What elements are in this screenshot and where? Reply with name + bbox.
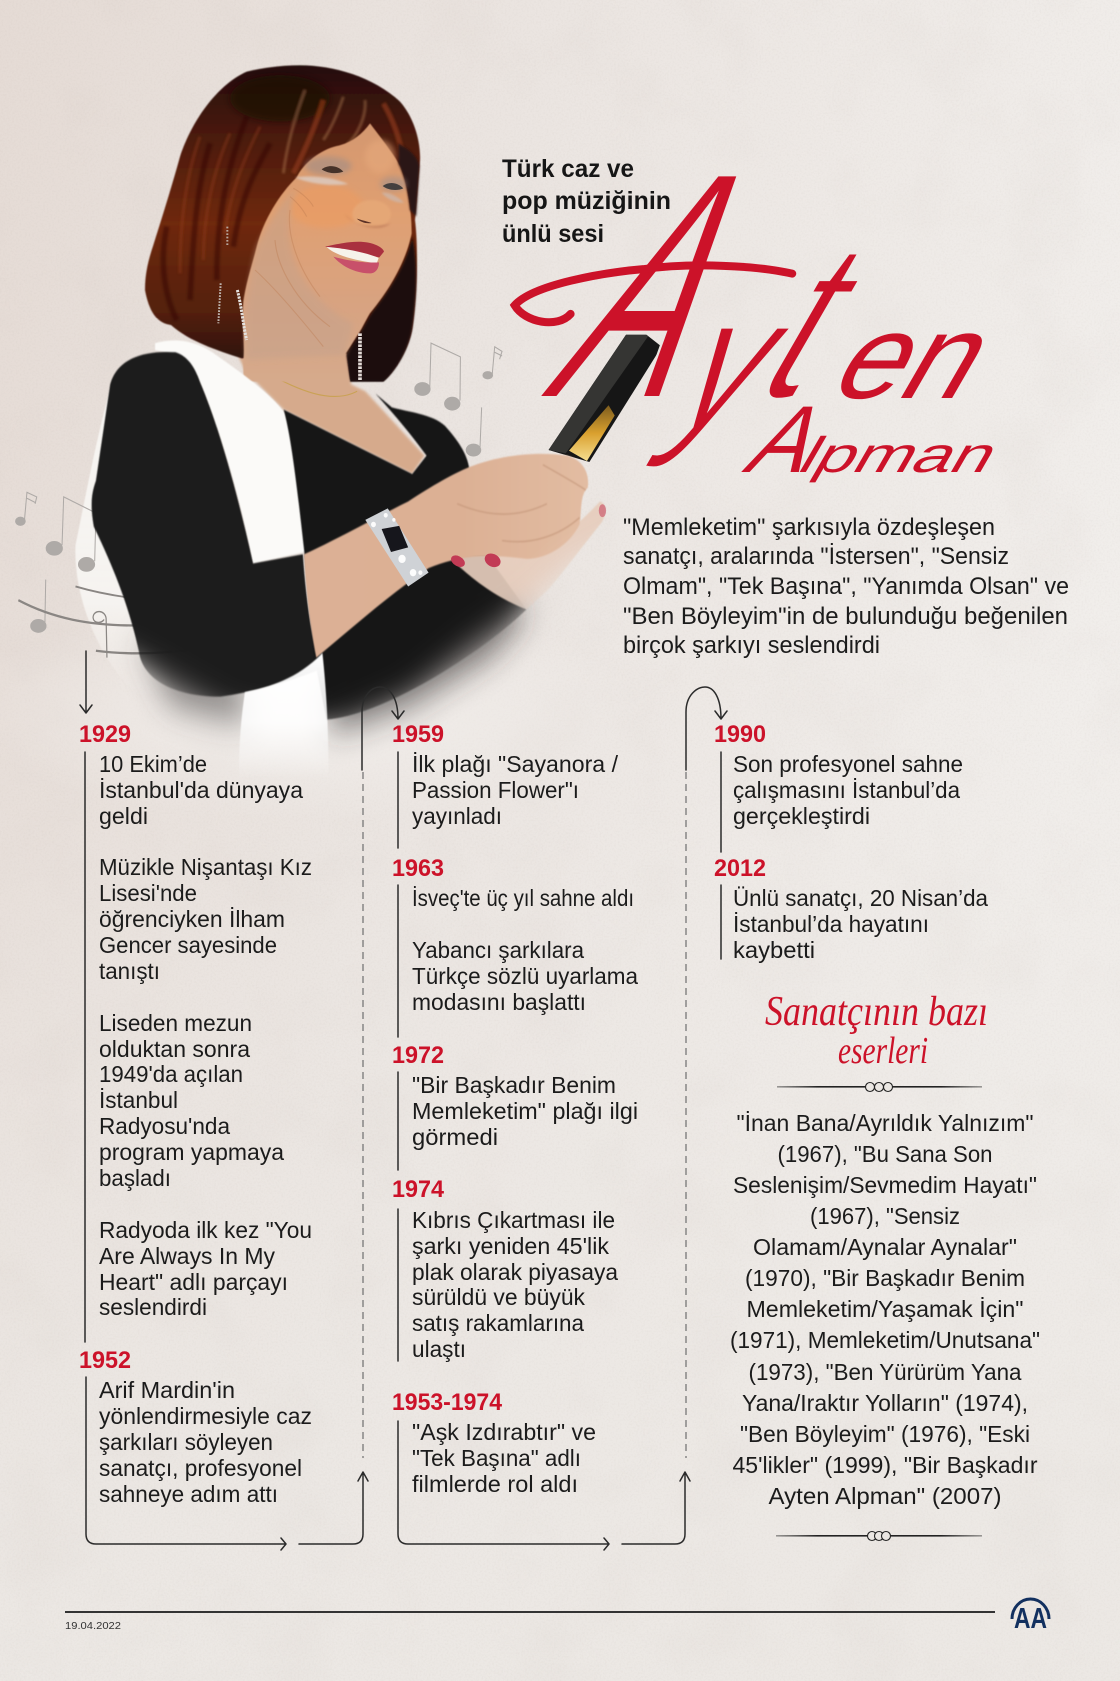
footer rule [65, 1611, 995, 1613]
timeline column 2: İlk plağı "Sayanora / [412, 751, 619, 777]
timeline column 2: ulaştı [412, 1336, 466, 1362]
selected works list: Seslenişim/Sevmedim Hayatı" [733, 1172, 1037, 1198]
timeline column 1: İstanbul [99, 1087, 178, 1113]
white scarf left side [75, 382, 171, 697]
ornament divider bottom [776, 1532, 982, 1540]
title: Ayten: en [810, 291, 1022, 424]
timeline column 1: tanıştı [99, 958, 160, 984]
timeline column 1: yönlendirmesiyle caz [99, 1403, 312, 1429]
timeline column 1: sahneye adım attı [99, 1481, 278, 1507]
selected works list: (1973), "Ben Yürürüm Yana [748, 1359, 1022, 1385]
timeline column 2: 1974 [392, 1176, 445, 1203]
timeline column 2: satış rakamlarına [412, 1310, 584, 1336]
timeline column 1: Arif Mardin'in [99, 1377, 235, 1403]
selected works list [730, 1110, 1040, 1509]
neck and chest [238, 353, 426, 474]
second hand [449, 501, 605, 609]
face [243, 123, 412, 382]
subtitle: ünlü sesi [502, 220, 604, 248]
timeline column 1: Are Always In My [99, 1243, 275, 1269]
earrings [218, 227, 360, 380]
subtitle: Türk caz ve [502, 155, 634, 183]
timeline column 3: çalışmasını İstanbul’da [733, 777, 960, 803]
selected works list: Memleketim/Yaşamak İçin" [746, 1296, 1024, 1322]
intro paragraph: "Ben Böyleyim"in de bulunduğu beğenilen [623, 603, 1068, 630]
timeline column 2: şarkı yeniden 45'lik [412, 1233, 609, 1259]
timeline column 1: başladı [99, 1165, 171, 1191]
timeline column 2: yayınladı [412, 803, 502, 829]
title: Ayten: t [720, 195, 911, 446]
timeline column 1: Radyoda ilk kez "You [99, 1217, 312, 1243]
selected works list: (1967), "Bu Sana Son [778, 1141, 992, 1167]
timeline column 2: "Aşk Izdırabtır" ve [412, 1419, 596, 1445]
timeline column 2: "Tek Başına" adlı [412, 1445, 581, 1471]
forearm and holding hand [304, 454, 588, 658]
date: 19.04.2022 [65, 1620, 121, 1632]
timeline column 3: 2012 [714, 855, 766, 882]
selected works list: 45'likler" (1999), "Bir Başkadır [732, 1452, 1038, 1478]
intro paragraph [623, 514, 1069, 659]
timeline column 2: "Bir Başkadır Benim [412, 1072, 616, 1098]
timeline column 1: olduktan sonra [99, 1036, 250, 1062]
timeline column 1: öğrenciyken İlham [99, 906, 285, 932]
timeline column 2: İsveç'te üç yıl sahne aldı [412, 885, 634, 911]
timeline column 1: Lisesi'nde [99, 880, 197, 906]
timeline column 2: Türkçe sözlü uyarlama [412, 963, 638, 989]
timeline column 2 [392, 721, 638, 1497]
heading: selected works [765, 989, 988, 1072]
title: Alpman: lpman [789, 428, 1011, 483]
white scarf over shoulder [155, 340, 313, 563]
right fringe [398, 143, 419, 217]
timeline column 1: Liseden mezun [99, 1010, 252, 1036]
timeline column 2: 1972 [392, 1042, 444, 1069]
timeline column 2: Yabancı şarkılara [412, 937, 584, 963]
timeline column 2: 1953-1974 [392, 1389, 503, 1416]
timeline column 1: Müzikle Nişantaşı Kız [99, 854, 312, 880]
music notes and staff: left of portrait [15, 492, 306, 658]
icon: AA logo: AA [1014, 1603, 1047, 1635]
selected works list: "Ben Böyleyim" (1976), "Eski [740, 1421, 1030, 1447]
soft shadow fading under the arm [139, 568, 527, 733]
title: Alpman: A [729, 386, 849, 492]
timeline column 3: 1990 [714, 721, 766, 748]
ornament divider top [777, 1082, 982, 1092]
timeline column 1: seslendirdi [99, 1294, 207, 1320]
white scarf lower drape [239, 653, 329, 779]
selected works list: Olamam/Aynalar Aynalar" [753, 1234, 1017, 1260]
bracelet [365, 508, 429, 586]
red nails [449, 504, 606, 569]
selected works list: (1970), "Bir Başkadır Benim [745, 1265, 1025, 1291]
timeline column 2: filmlerde rol aldı [412, 1471, 578, 1497]
timeline column 1: geldi [99, 803, 148, 829]
timeline column 3: Ünlü sanatçı, 20 Nisan’da [733, 885, 988, 911]
timeline column 1: Radyosu'nda [99, 1113, 230, 1139]
heading: selected works: eserleri [838, 1030, 928, 1072]
black blouse sleeve [92, 352, 320, 697]
award [549, 324, 662, 462]
timeline column 1 [79, 721, 312, 1507]
hair dark crown and strands [163, 75, 403, 320]
black blouse front [284, 394, 527, 720]
timeline column 1: 1952 [79, 1347, 131, 1374]
timeline column 3: gerçekleştirdi [733, 803, 870, 829]
timeline column 2: Passion Flower"ı [412, 777, 579, 803]
selected works list: Ayten Alpman" (2007) [768, 1483, 1002, 1509]
timeline column 3: Son profesyonel sahne [733, 751, 963, 777]
subtitle [502, 155, 671, 248]
timeline column 1: Gencer sayesinde [99, 932, 277, 958]
selected works list: (1967), "Sensiz [810, 1203, 960, 1229]
timeline column 2: Memleketim" plağı ilgi [412, 1098, 638, 1124]
selected works list: "İnan Bana/Ayrıldık Yalnızım" [736, 1110, 1034, 1136]
intro paragraph: sanatçı, aralarında "İstersen", "Sensiz [623, 543, 1009, 570]
timeline connectors and arrows [80, 651, 727, 1550]
selected works list: (1971), Memleketim/Unutsana" [730, 1327, 1040, 1353]
title: Ayten: y [639, 257, 832, 469]
face shading and features [246, 140, 407, 360]
timeline column 2: plak olarak piyasaya [412, 1259, 618, 1285]
hair [145, 65, 420, 382]
music notes: upper right of portrait [414, 343, 502, 456]
intro paragraph: birçok şarkıyı seslendirdi [623, 632, 880, 659]
timeline column 1: 10 Ekim’de [99, 751, 207, 777]
intro paragraph: "Memleketim" şarkısıyla özdeşleşen [623, 514, 995, 541]
timeline column 1: şarkıları söyleyen [99, 1429, 273, 1455]
portrait photo: Ayten Alpman holding an award [92, 65, 662, 720]
timeline column 3: kaybetti [733, 937, 815, 963]
head [145, 65, 420, 382]
timeline column 2: 1959 [392, 721, 444, 748]
title: Ayten: A [498, 105, 830, 467]
dark lower right hair [347, 237, 416, 381]
intro paragraph: Olmam", "Tek Başına", "Yanımda Olsan" ve [623, 573, 1069, 600]
heading: selected works: Sanatçının bazı [765, 989, 988, 1035]
timeline column 1: İstanbul'da dünyaya [99, 777, 303, 803]
timeline column 1: 1949'da açılan [99, 1061, 243, 1087]
selected works list: Yana/Iraktır Yolların" (1974), [742, 1390, 1028, 1416]
subtitle: pop müziğinin [502, 187, 671, 215]
finger lines [457, 465, 586, 542]
timeline column 1: 1929 [79, 721, 131, 748]
timeline column 2: görmedi [412, 1124, 498, 1150]
timeline column 2: Kıbrıs Çıkartması ile [412, 1207, 615, 1233]
timeline column 1: Heart" adlı parçayı [99, 1269, 288, 1295]
timeline column 2: 1963 [392, 855, 444, 882]
timeline column 2: modasını başlattı [412, 989, 586, 1015]
timeline column 1: sanatçı, profesyonel [99, 1455, 302, 1481]
timeline column 2: sürüldü ve büyük [412, 1284, 585, 1310]
timeline column 3: İstanbul’da hayatını [733, 911, 929, 937]
timeline column 3 [714, 721, 988, 963]
timeline column 1: program yapmaya [99, 1139, 284, 1165]
decorative swash across title [515, 265, 792, 322]
